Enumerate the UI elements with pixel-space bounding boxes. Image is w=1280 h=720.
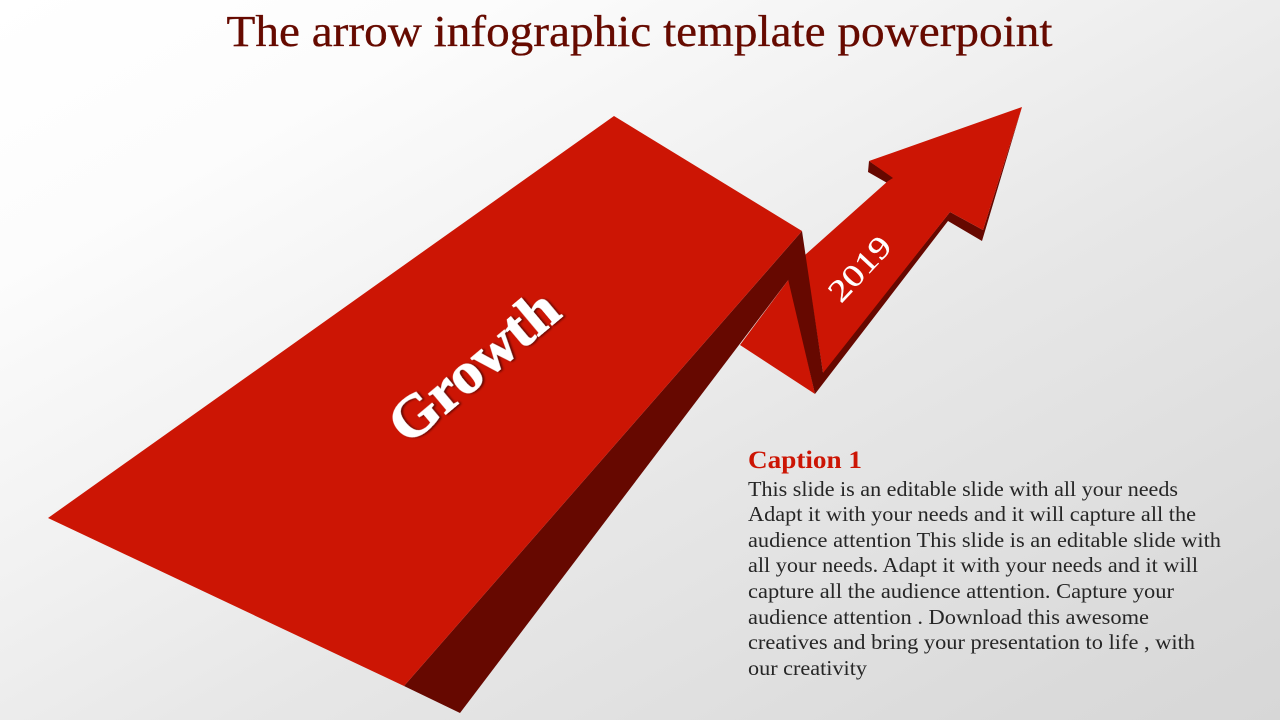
caption body: capture all the audience attention. Capture your (748, 579, 1174, 603)
caption body (748, 477, 1221, 680)
caption body: audience attention . Download this awesome (748, 605, 1149, 629)
big panel side shadow (404, 231, 802, 713)
arrow head rim shadow (868, 161, 894, 184)
arrow body with head (805, 107, 1022, 373)
caption block (748, 447, 1221, 680)
label: 2019: 2019 (821, 229, 899, 309)
arrow lower rim shadow (815, 107, 1022, 394)
caption body: our creativity (748, 656, 867, 680)
caption body: all your needs. Adapt it with your needs and it will (748, 553, 1198, 577)
caption body: audience attention This slide is an editable slide with (748, 528, 1221, 552)
caption body: Adapt it with your needs and it will capture all the (748, 502, 1196, 526)
arrow graphic (48, 107, 1022, 713)
arrow tail fold (740, 279, 815, 394)
title: The arrow infographic template powerpoint (226, 7, 1052, 56)
caption heading: Caption 1 (748, 447, 862, 474)
big red panel (48, 116, 802, 686)
label: Growth: Growth (375, 276, 572, 456)
caption body: creatives and bring your presentation to life , with (748, 630, 1195, 654)
fold shadow strip (760, 231, 823, 394)
caption body: This slide is an editable slide with all your needs (748, 477, 1178, 501)
